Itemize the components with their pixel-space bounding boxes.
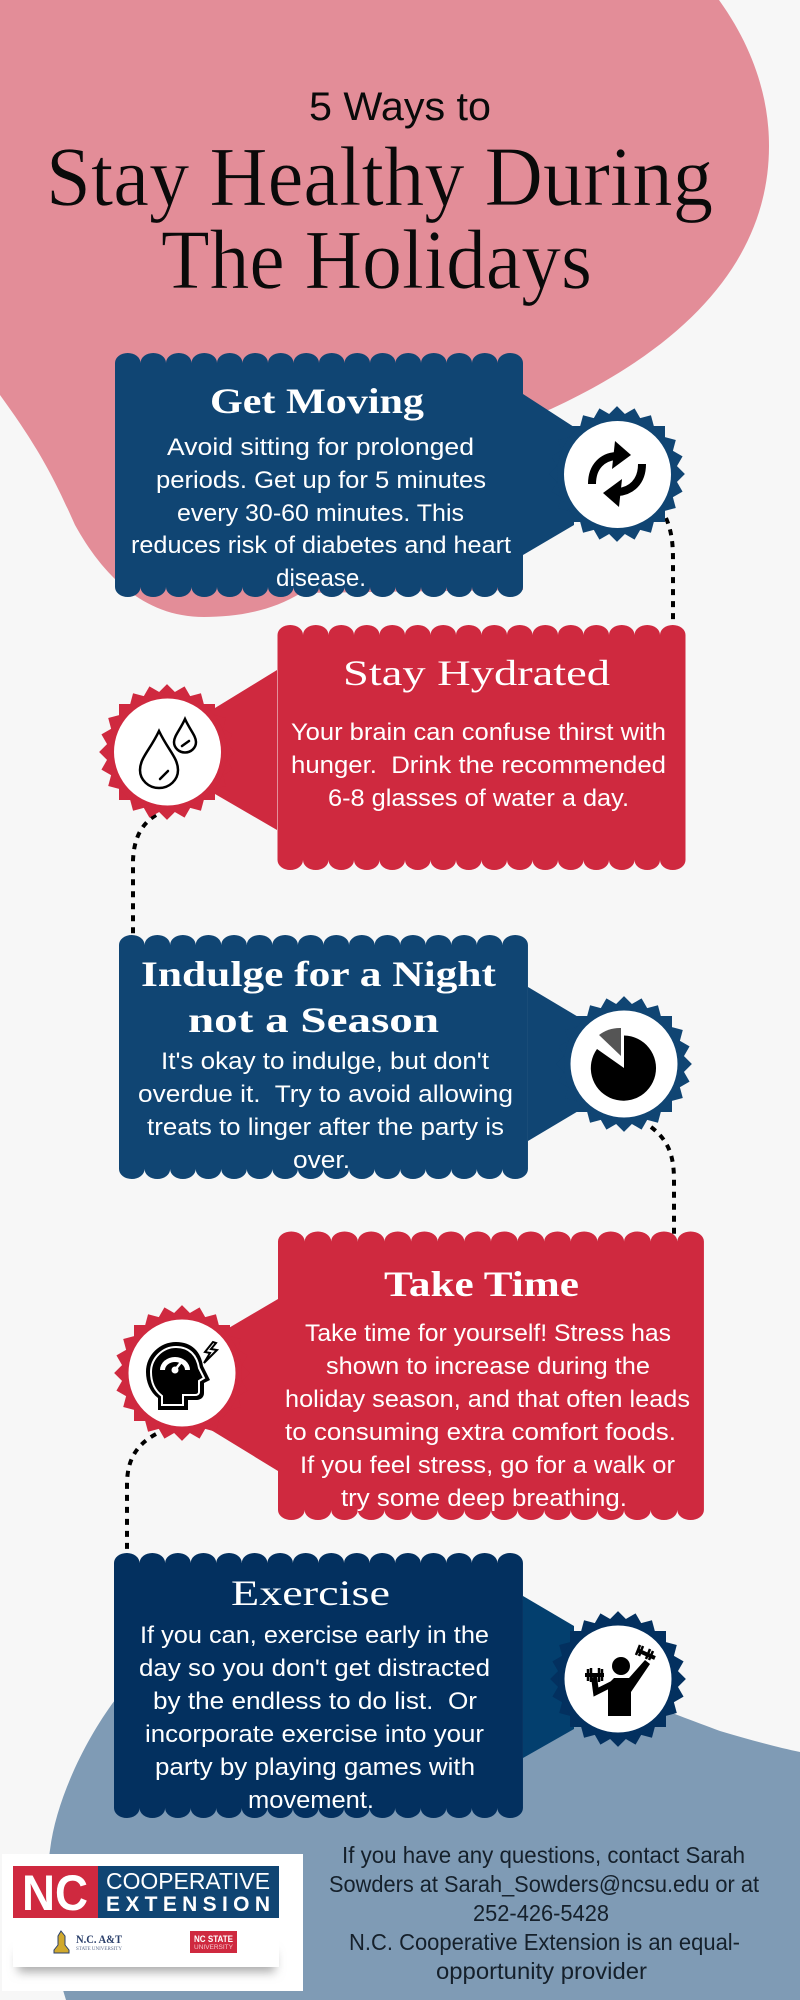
dotted connector 3: [651, 1127, 674, 1238]
text: get moving body: Avoid sitting for prolonged: [167, 434, 474, 461]
logo: NC Cooperative Extension: COOPERATIVE: [106, 1868, 270, 1894]
text: stay hydrated body: [291, 719, 666, 812]
panel: exercise: [114, 1553, 574, 1818]
text: take time body: [285, 1320, 690, 1512]
icon: water drops badge: [99, 684, 235, 820]
text: exercise body: If you can, exercise early in the: [140, 1622, 489, 1649]
contact text: Sowders at Sarah_Sowders@ncsu.edu or at: [329, 1871, 760, 1897]
logo: NC Cooperative Extension: NC STATE: [194, 1934, 233, 1944]
title line 1: Stay Healthy During: [46, 130, 713, 224]
logo: NC Cooperative Extension: [2, 1854, 303, 1991]
text: take time body: If you feel stress, go for a walk or: [300, 1452, 675, 1479]
icon: weightlifter badge: [550, 1611, 686, 1747]
text: stay hydrated body: 6-8 glasses of water a day.: [328, 785, 629, 812]
text: stay hydrated body: Your brain can confuse thirst with: [291, 719, 666, 746]
text: get moving body: disease.: [276, 565, 366, 592]
contact text: opportunity provider: [436, 1958, 647, 1984]
text: get moving body: [131, 434, 511, 592]
text: take time body: Take time for yourself! Stress has: [305, 1320, 671, 1347]
dotted connector 4: [127, 1434, 156, 1553]
text: exercise body: by the endless to do list. Or: [153, 1688, 477, 1715]
text: exercise body: [139, 1622, 490, 1814]
contact text: N.C. Cooperative Extension is an equal-: [349, 1929, 740, 1955]
icon: stressed head badge: [114, 1305, 250, 1441]
text: take time body: shown to increase during the: [326, 1353, 650, 1380]
text: indulge body: over.: [293, 1147, 350, 1174]
title kicker: 5 Ways to: [309, 85, 491, 129]
text: get moving body: every 30-60 minutes. This: [177, 500, 464, 527]
panel: stay hydrated: [215, 625, 686, 870]
text: take time body: try some deep breathing.: [341, 1485, 627, 1512]
panel: take time: [211, 1231, 704, 1520]
title line 2: The Holidays: [161, 213, 592, 307]
text: indulge body: treats to linger after the party is: [147, 1114, 504, 1141]
icon: pie chart badge: [556, 996, 692, 1132]
contact text: 252-426-5428: [473, 1900, 609, 1926]
text: stay hydrated body: hunger. Drink the recommended: [291, 752, 666, 779]
blue background blob: [48, 1600, 800, 2000]
heading: indulge for a night: not a Season: [188, 1000, 439, 1040]
panel: get moving: [115, 353, 574, 597]
heading: indulge for a night: Indulge for a Night: [141, 954, 496, 994]
text: indulge body: overdue it. Try to avoid allowing: [138, 1081, 513, 1108]
text: exercise body: day so you don't get distracted: [139, 1655, 490, 1682]
pink background blob: [0, 0, 769, 617]
contact text: [329, 1842, 760, 1984]
text: take time body: to consuming extra comfort foods.: [285, 1419, 676, 1446]
text: exercise body: party by playing games with: [155, 1754, 475, 1781]
dotted connector 1: [666, 518, 673, 625]
icon: refresh arrows badge: [549, 406, 685, 542]
logo: NC Cooperative Extension: NC: [22, 1865, 88, 1921]
text: exercise body: movement.: [248, 1787, 374, 1814]
contact text: If you have any questions, contact Sarah: [342, 1842, 745, 1868]
text: indulge body: [138, 1048, 513, 1174]
text: take time body: holiday season, and that often leads: [285, 1386, 690, 1413]
heading: take time: Take Time: [384, 1264, 579, 1304]
dotted connector 2: [133, 815, 156, 935]
logo: NC Cooperative Extension: UNIVERSITY: [194, 1945, 233, 1951]
text: exercise body: incorporate exercise into your: [145, 1721, 484, 1748]
text: get moving body: periods. Get up for 5 minutes: [156, 467, 486, 494]
logo: NC Cooperative Extension: N.C. A&T: [76, 1932, 122, 1946]
heading: stay hydrated: Stay Hydrated: [343, 653, 610, 693]
logo: NC Cooperative Extension: EXTENSION: [106, 1893, 270, 1916]
heading: indulge for a night: [141, 954, 496, 1040]
panel: indulge for a night: [119, 935, 580, 1179]
heading: exercise: Exercise: [231, 1573, 390, 1613]
text: get moving body: reduces risk of diabetes and heart: [131, 532, 511, 559]
title: [46, 85, 713, 307]
heading: get moving: Get Moving: [210, 381, 424, 421]
logo: NC Cooperative Extension: STATE UNIVERSITY: [76, 1947, 122, 1952]
text: indulge body: It's okay to indulge, but don't: [161, 1048, 489, 1075]
